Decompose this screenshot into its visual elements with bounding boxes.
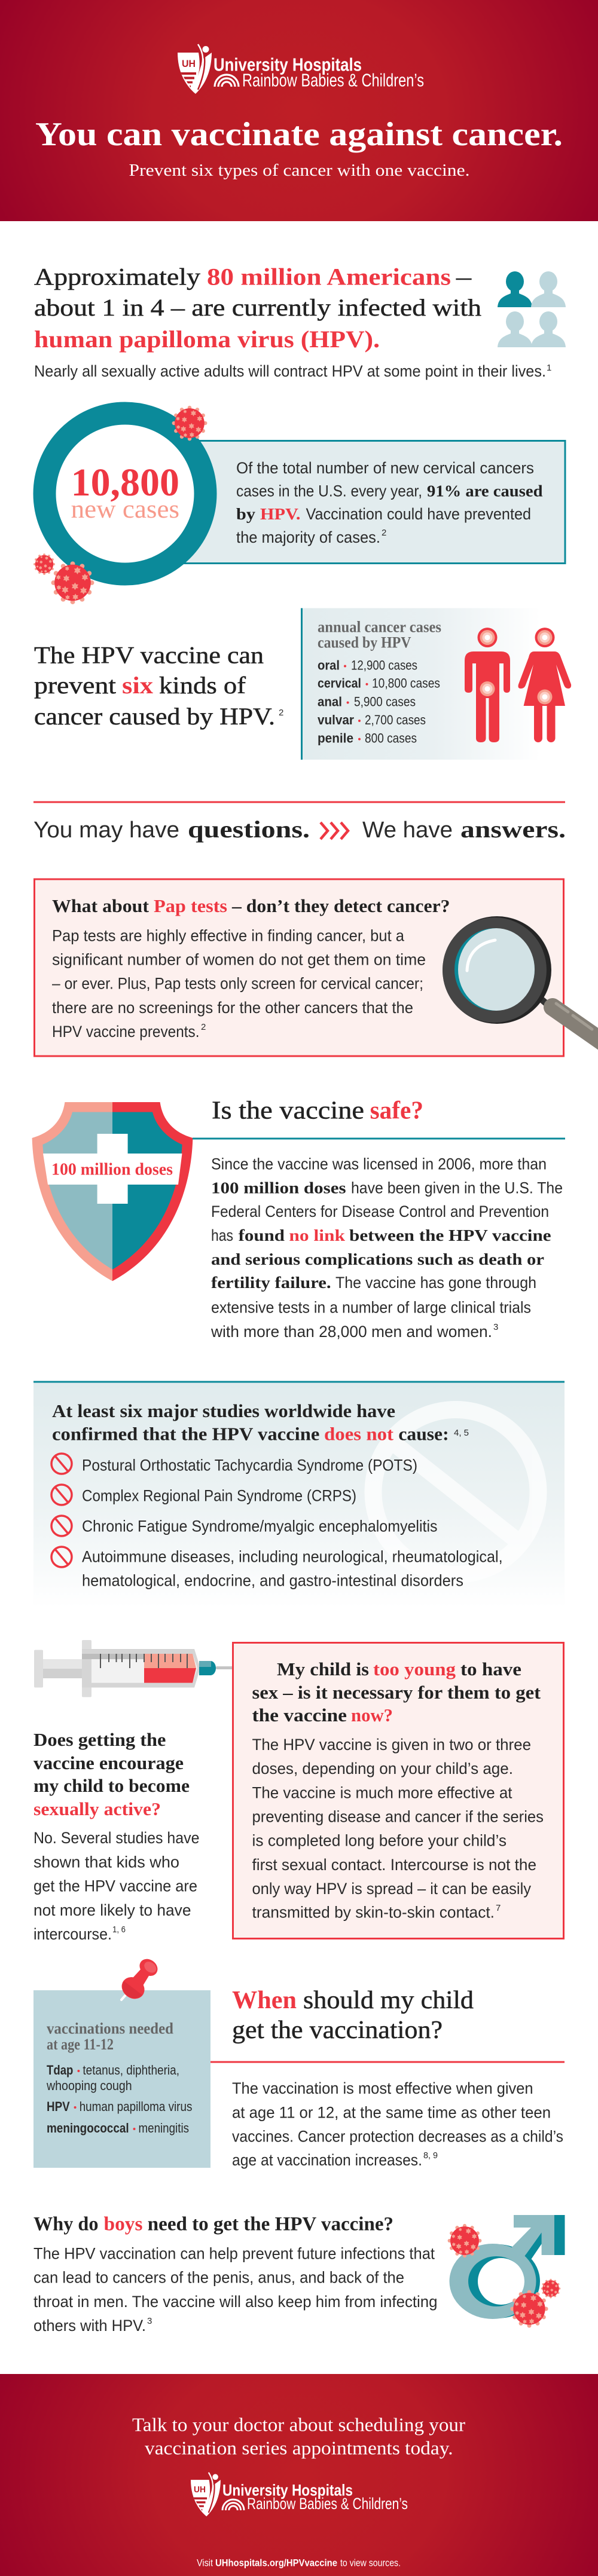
chart: 10,800 new cases ring: new cases: [71, 495, 179, 524]
text block: when to vaccinate: The vaccination is most effective when given: [232, 2079, 533, 2097]
panel: six major studies: cause:: [398, 1423, 449, 1444]
logo: footer University Hospitals: [191, 2471, 408, 2516]
text block: why boys need the vaccine: The HPV vaccination can help prevent future infections that: [33, 2245, 435, 2263]
panel: annual cancer cases list: cervical: [318, 676, 361, 691]
sources note: UHhospitals.org/HPVvaccine: [215, 2557, 337, 2568]
text block: does the vaccine encourage sexual activity: vaccine encourage: [33, 1752, 184, 1773]
heading: Is the vaccine safe?: Is the vaccine: [212, 1097, 364, 1125]
text block: 80 million Americans infected: Nearly all sexually active adults will contract HPV at some point in their lives.: [34, 362, 546, 380]
text block: when to vaccinate: [232, 2079, 563, 2169]
text block: why boys need the vaccine: Why do: [33, 2213, 98, 2235]
logo: footer University Hospitals: Rainbow Babies & Children’s: [247, 2495, 408, 2513]
panel: vaccinations needed note: meningitis: [139, 2121, 189, 2136]
text block: 80 million Americans infected: human papilloma virus (HPV).: [34, 326, 380, 353]
panel: too young: My child is: [277, 1659, 369, 1679]
panel: cervical cancer fact box: [179, 441, 565, 563]
icon: shield, 100 million doses: 100 million doses: [51, 1160, 173, 1179]
text block: 80 million Americans infected: about 1 in 4 – are currently infected with: [34, 294, 481, 321]
text block: 80 million Americans infected: Approximately: [34, 264, 200, 290]
panel: cervical cancer fact box: the majority of cases.: [236, 528, 380, 546]
icon: magnifying glass: [443, 916, 598, 1043]
panel: annual cancer cases list: penile: [318, 730, 353, 746]
sources note: [197, 2557, 401, 2568]
icon: large faded no symbol: [373, 1409, 538, 1574]
heading: When should my child get the vaccination?: get the vaccination?: [232, 2017, 443, 2044]
text block: when to vaccinate: vaccines. Cancer protection decreases as a child’s: [232, 2127, 563, 2145]
subtitle: Prevent six types of cancer with one vaccine.: [129, 161, 470, 180]
logo: University Hospitals Rainbow Babies & Children's: University Hospitals: [213, 54, 362, 75]
panel: six major studies: 4, 5: [454, 1428, 469, 1438]
panel: Pap tests: [35, 879, 563, 1056]
panel: six major studies: does not: [324, 1423, 394, 1444]
text block: 80 million Americans infected: 80 million Americans: [207, 264, 451, 290]
panel: cervical cancer fact box: Vaccination could have prevented: [306, 505, 531, 523]
text block: why boys need the vaccine: 3: [147, 2316, 152, 2326]
panel: annual cancer cases list: annual cancer cases: [318, 618, 441, 636]
panel: too young: sex – is it necessary for them to get: [252, 1682, 541, 1703]
heading: When should my child get the vaccination?: should my child: [303, 1987, 474, 2014]
heading: When should my child get the vaccination?: [232, 1987, 474, 2044]
panel: Pap tests: What about: [52, 895, 150, 916]
panel: Pap tests: there are no screenings for the other cancers that the: [52, 999, 413, 1017]
text block: does the vaccine encourage sexual activity: shown that kids who: [33, 1853, 179, 1871]
panel: too young: first sexual contact. Intercourse is not the: [252, 1856, 536, 1874]
panel: header banner: [0, 0, 598, 221]
text block: does the vaccine encourage sexual activity: 1, 6: [112, 1925, 126, 1935]
chart: 10,800 new cases ring: 10,800: [71, 461, 179, 504]
heading: questions and answers: answers.: [460, 816, 566, 843]
panel: too young: preventing disease and cancer if the series: [252, 1807, 544, 1825]
panel: Pap tests: Pap tests: [154, 895, 227, 916]
panel: vaccinations needed note: HPV: [47, 2099, 70, 2114]
panel: footer banner: [0, 2374, 598, 2576]
panel: six major studies: Complex Regional Pain Syndrome (CRPS): [82, 1487, 356, 1505]
panel: cervical cancer fact box: HPV.: [260, 505, 300, 523]
text block: vaccine safety: no link: [289, 1226, 345, 1244]
panel: annual cancer cases list: 12,900 cases: [351, 657, 417, 672]
text block: does the vaccine encourage sexual activity: No. Several studies have: [33, 1829, 200, 1847]
title: You can vaccinate against cancer.: [35, 116, 563, 153]
panel: Pap tests: Pap tests are highly effective in finding cancer, but a: [52, 926, 405, 944]
heading: questions and answers: We have: [362, 818, 453, 843]
text block: why boys need the vaccine: boys: [104, 2213, 143, 2235]
panel: Pap tests: significant number of women do not get them on time: [52, 950, 426, 968]
panel: vaccinations needed note: at age 11-12: [47, 2036, 114, 2053]
panel: cervical cancer fact box: 91% are caused: [427, 482, 543, 500]
text block: vaccine safety: 3: [493, 1322, 498, 1332]
panel: six major studies: At least six major studies worldwide have: [52, 1400, 395, 1421]
panel: too young: doses, depending on your child’s age.: [252, 1760, 513, 1777]
panel: cervical cancer fact box: cases in the U.S. every year,: [236, 482, 422, 500]
icon: four people, one in four highlighted: [498, 271, 566, 347]
panel: vaccinations needed note: human papilloma virus: [80, 2099, 192, 2114]
panel: too young: the vaccine: [252, 1705, 347, 1726]
panel: too young: [233, 1642, 563, 1939]
icon: shield, 100 million doses: [32, 1102, 193, 1281]
chart: 10,800 new cases ring: [44, 414, 206, 574]
panel: six major studies: Autoimmune diseases, including neurological, rheumatological,: [82, 1548, 503, 1566]
text block: vaccine safety: between the HPV vaccine: [349, 1226, 551, 1244]
text block: why boys need the vaccine: others with HPV.: [33, 2317, 146, 2335]
heading: When should my child get the vaccination?: When: [232, 1987, 297, 2014]
text block: vaccine safety: Federal Centers for Disease Control and Prevention: [211, 1203, 549, 1220]
panel: six major studies: confirmed that the HPV vaccine: [52, 1423, 319, 1444]
heading: HPV vaccine prevents six kinds: The HPV vaccine can: [34, 641, 264, 668]
sources note: to view sources.: [340, 2557, 401, 2568]
logo: University Hospitals Rainbow Babies & Children's: Rainbow Babies & Children’s: [242, 70, 424, 91]
panel: six major studies: Postural Orthostatic Tachycardia Syndrome (POTS): [82, 1457, 417, 1474]
panel: too young: only way HPV is spread – it can be easily: [252, 1880, 531, 1898]
text block: when to vaccinate: at age 11 or 12, at the same time as other teen: [232, 2104, 551, 2122]
text block: why boys need the vaccine: throat in men. The vaccine will also keep him from infecting: [33, 2293, 438, 2311]
text block: vaccine safety: 100 million doses: [211, 1179, 346, 1197]
text block: why boys need the vaccine: [33, 2213, 438, 2335]
text block: vaccine safety: fertility failure.: [211, 1274, 331, 1292]
logo: footer University Hospitals: UH: [194, 2485, 206, 2495]
text block: vaccine safety: Since the vaccine was licensed in 2006, more than: [211, 1155, 547, 1173]
heading: questions and answers: [33, 816, 566, 843]
text block: why boys need the vaccine: need to get the HPV vaccine?: [148, 2213, 393, 2235]
panel: annual cancer cases list: 5,900 cases: [354, 694, 416, 709]
panel: vaccinations needed note: meningococcal: [47, 2121, 129, 2136]
heading: HPV vaccine prevents six kinds: 2: [279, 708, 283, 718]
text block: 80 million Americans infected: [34, 264, 551, 380]
text block: does the vaccine encourage sexual activity: get the HPV vaccine are: [33, 1877, 197, 1895]
panel: Pap tests: – or ever. Plus, Pap tests only screen for cervical cancer;: [52, 974, 423, 992]
heading: HPV vaccine prevents six kinds: six: [122, 672, 153, 699]
text block: when to vaccinate: age at vaccination increases.: [232, 2151, 422, 2169]
text block: vaccine safety: [210, 1155, 563, 1341]
panel: too young: The HPV vaccine is given in two or three: [252, 1736, 531, 1754]
call to action: [132, 2413, 465, 2459]
panel: annual cancer cases list: caused by HPV: [318, 634, 411, 651]
panel: cervical cancer fact box: by: [236, 505, 256, 523]
panel: annual cancer cases list: 2,700 cases: [365, 712, 426, 727]
panel: annual cancer cases list: anal: [318, 694, 342, 709]
panel: vaccinations needed note: whooping cough: [46, 2078, 132, 2093]
panel: too young: 7: [496, 1903, 501, 1913]
heading: HPV vaccine prevents six kinds: kinds of: [159, 672, 246, 699]
panel: six major studies: Chronic Fatigue Syndrome/myalgic encephalomyelitis: [82, 1518, 438, 1535]
panel: Pap tests: HPV vaccine prevents.: [52, 1023, 200, 1041]
text block: vaccine safety: and serious complications such as death or: [211, 1250, 544, 1268]
text block: vaccine safety: has: [211, 1226, 233, 1244]
panel: annual cancer cases list: [301, 608, 541, 760]
text block: why boys need the vaccine: can lead to cancers of the penis, anus, and back of the: [33, 2269, 404, 2287]
panel: too young: is completed long before your child’s: [252, 1831, 507, 1849]
text block: vaccine safety: extensive tests in a number of large clinical trials: [211, 1299, 531, 1317]
call to action: vaccination series appointments today.: [145, 2437, 453, 2459]
panel: too young: The vaccine is much more effective at: [252, 1784, 512, 1802]
text block: does the vaccine encourage sexual activity: [33, 1729, 200, 1943]
logo: footer University Hospitals: University Hospitals: [222, 2481, 353, 2499]
panel: cervical cancer fact box: 2: [382, 528, 386, 538]
heading: HPV vaccine prevents six kinds: prevent: [34, 672, 116, 699]
heading: Is the vaccine safe?: [212, 1097, 423, 1125]
text block: does the vaccine encourage sexual activity: not more likely to have: [33, 1901, 191, 1919]
icon: man figure: [465, 628, 510, 742]
panel: too young: transmitted by skin-to-skin contact.: [252, 1904, 495, 1922]
text block: 80 million Americans infected: 1: [547, 363, 551, 373]
text block: does the vaccine encourage sexual activity: my child to become: [33, 1775, 190, 1796]
panel: too young: too young: [373, 1659, 456, 1679]
sources note: Visit: [197, 2557, 213, 2568]
panel: too young: now?: [351, 1705, 393, 1726]
text block: does the vaccine encourage sexual activity: sexually active?: [33, 1798, 161, 1819]
text block: when to vaccinate: 8, 9: [423, 2150, 438, 2161]
panel: six major studies: hematological, endocrine, and gastro-intestinal disorders: [82, 1572, 463, 1590]
icon: virus particles around ring: [33, 406, 207, 604]
icon: syringe: [34, 1640, 263, 1697]
heading: Is the vaccine safe?: safe?: [370, 1097, 423, 1125]
panel: six major studies: [33, 1381, 565, 1608]
panel: too young: to have: [460, 1659, 521, 1679]
panel: Pap tests: – don’t they detect cancer?: [231, 895, 450, 916]
text block: 80 million Americans infected: –: [456, 264, 472, 290]
panel: vaccinations needed note: tetanus, diphtheria,: [83, 2063, 179, 2078]
heading: questions and answers: You may have: [33, 818, 179, 843]
panel: Pap tests: 2: [201, 1022, 206, 1032]
icon: push pin: [117, 1954, 163, 2003]
panel: vaccinations needed note: vaccinations needed: [47, 2020, 174, 2037]
panel: annual cancer cases list: vulvar: [318, 712, 354, 727]
heading: HPV vaccine prevents six kinds: cancer caused by HPV.: [34, 703, 275, 730]
icon: male symbol with viruses: [448, 2215, 565, 2328]
panel: annual cancer cases list: 10,800 cases: [372, 676, 440, 691]
heading: HPV vaccine prevents six kinds: [34, 641, 283, 730]
text block: does the vaccine encourage sexual activity: intercourse.: [33, 1925, 112, 1943]
icon: woman figure: [518, 628, 571, 742]
call to action: Talk to your doctor about scheduling your: [132, 2413, 465, 2435]
panel: vaccinations needed note: [33, 1990, 210, 2168]
text block: vaccine safety: have been given in the U.S. The: [351, 1179, 563, 1197]
panel: vaccinations needed note: Tdap: [47, 2063, 73, 2078]
heading: questions and answers: questions.: [188, 816, 310, 843]
text block: does the vaccine encourage sexual activity: Does getting the: [33, 1729, 166, 1750]
text block: vaccine safety: found: [239, 1226, 285, 1244]
logo: University Hospitals Rainbow Babies & Children's: [178, 43, 424, 94]
logo: University Hospitals Rainbow Babies & Children's: UH: [182, 58, 196, 69]
panel: annual cancer cases list: oral: [318, 657, 340, 672]
text block: vaccine safety: with more than 28,000 men and women.: [210, 1323, 492, 1341]
panel: annual cancer cases list: 800 cases: [365, 730, 417, 746]
text block: vaccine safety: The vaccine has gone through: [335, 1274, 536, 1292]
panel: cervical cancer fact box: Of the total number of new cervical cancers: [236, 459, 534, 477]
